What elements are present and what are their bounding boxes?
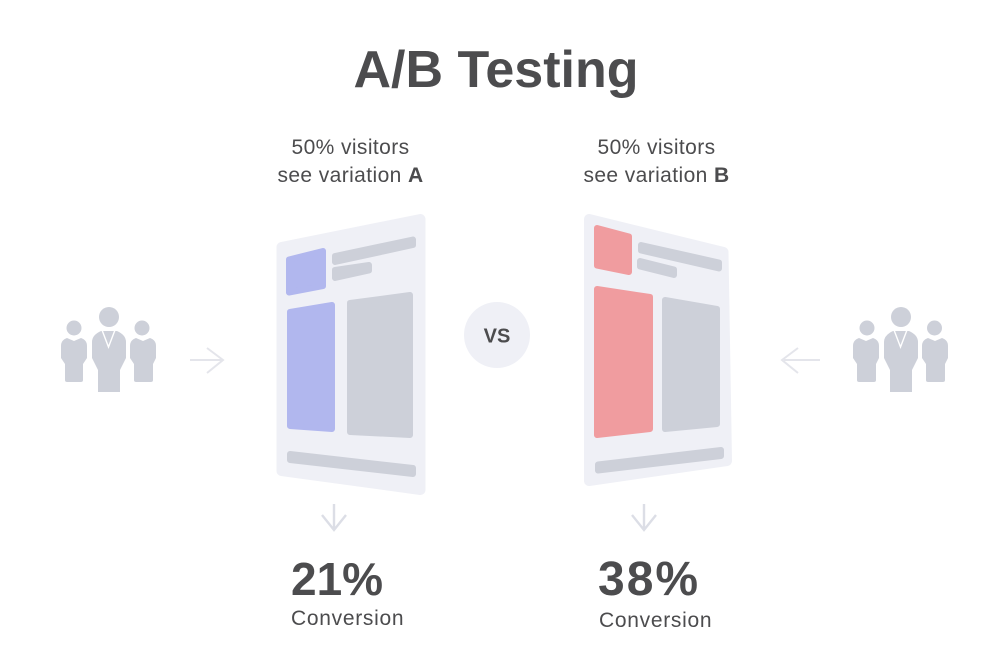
caption: variation B: [583, 136, 730, 187]
arrow: left to page A: [190, 348, 223, 373]
footer bar B: [598, 450, 721, 470]
text line A2: [335, 265, 369, 278]
result B: 38%: [598, 553, 700, 606]
title: A/B Testing: [353, 41, 639, 99]
result B: [598, 553, 712, 632]
caption: variation B: 50% visitors: [597, 136, 716, 159]
footer bar A: [290, 454, 413, 474]
result B: Conversion: [599, 609, 712, 632]
image block B: [597, 228, 629, 272]
result A: 21%: [291, 553, 383, 605]
vs badge: VS: [484, 326, 510, 348]
result A: [291, 553, 404, 630]
image block A: [289, 251, 323, 292]
text line A1: [335, 240, 413, 262]
content block B: [597, 289, 650, 435]
text line B1: [641, 245, 719, 268]
page background B: [589, 219, 727, 481]
icon: people right: [853, 307, 948, 392]
content block A: [290, 305, 332, 429]
panel: page mockup A: [282, 219, 420, 490]
result A: Conversion: [291, 607, 404, 630]
caption: variation A: 50% visitors: [291, 136, 410, 159]
caption: variation A: [277, 136, 424, 187]
arrow: right to page B: [782, 348, 820, 373]
icon: people left: [61, 307, 156, 392]
content block grey B: [665, 300, 717, 429]
vs badge: [464, 302, 530, 368]
arrow: page B down: [632, 504, 656, 530]
panel: page mockup B: [589, 219, 727, 481]
content block grey A: [350, 295, 410, 435]
text line B2: [640, 261, 674, 275]
page background A: [282, 219, 420, 490]
caption: variation B: see variation B: [583, 164, 730, 187]
caption: variation A: see variation A: [277, 164, 424, 187]
arrow: page A down: [322, 504, 346, 530]
